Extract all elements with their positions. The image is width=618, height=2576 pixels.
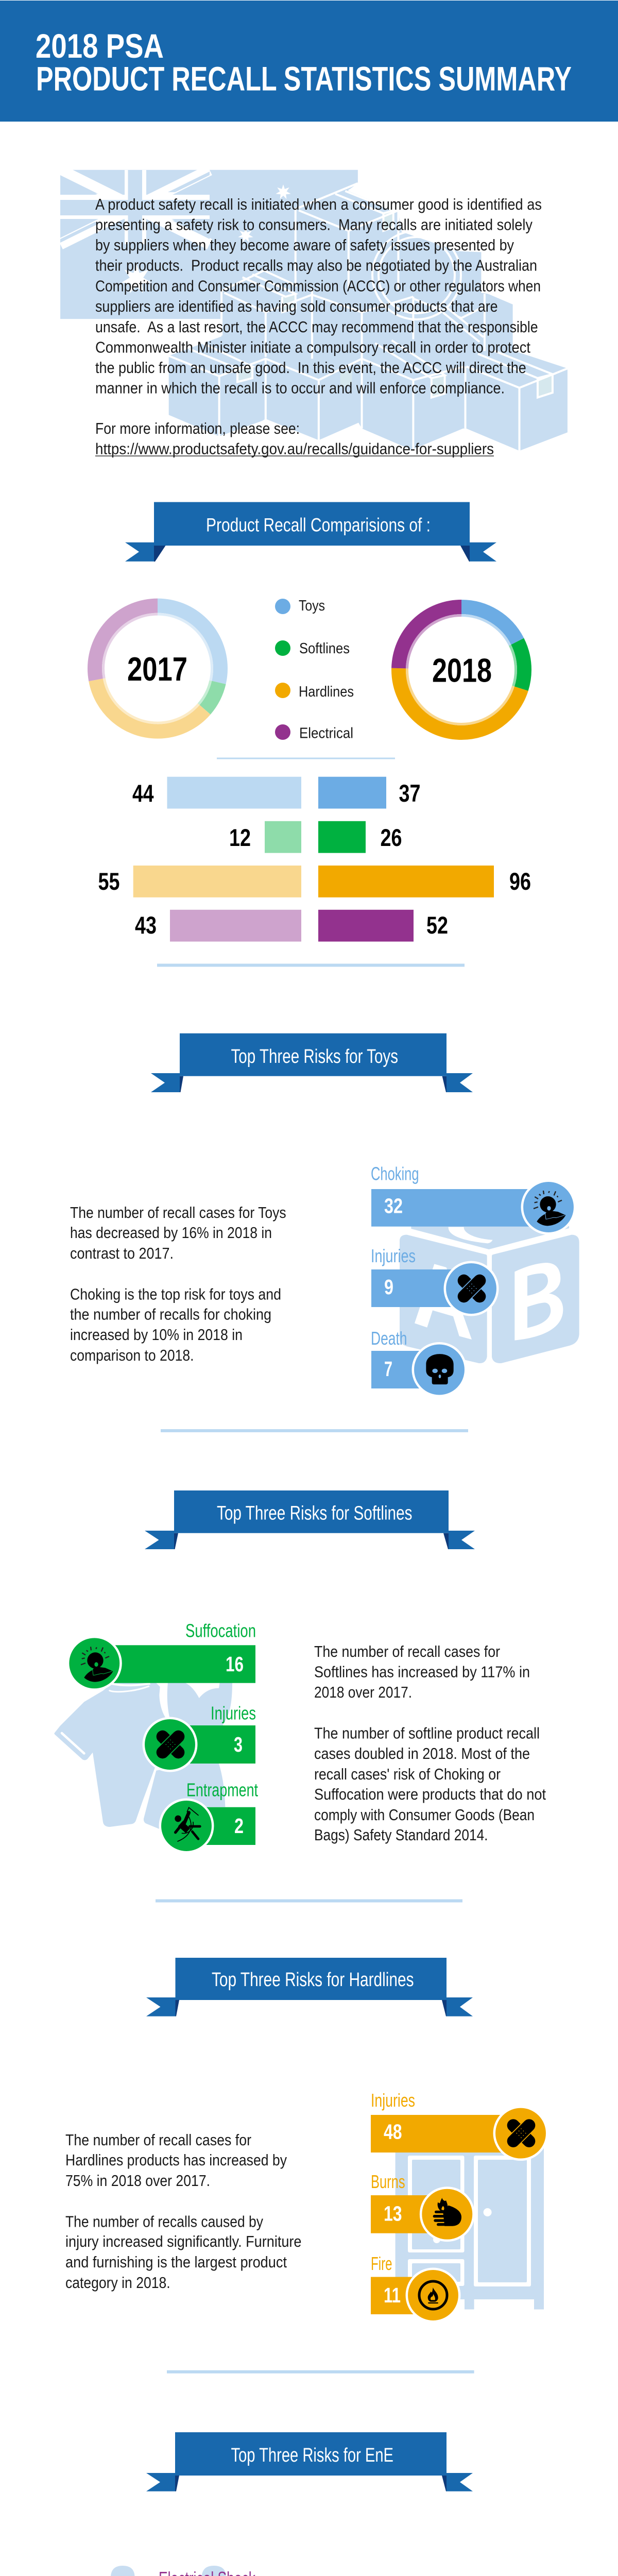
legend xyxy=(275,598,354,742)
intro text block: For more information, please see: xyxy=(95,419,300,437)
risk: injuries 3: Injuries xyxy=(211,1702,256,1724)
text: softlines summary: The number of softline product recall xyxy=(314,1724,540,1742)
text: softlines summary: Softlines has increased by 117% in xyxy=(314,1663,530,1681)
risk: injuries 9: 9 xyxy=(384,1275,393,1299)
butterfly bar chart 2017 vs 2018 xyxy=(98,777,531,942)
icon: bandage xyxy=(445,1262,497,1315)
risk: fire 11: 11 xyxy=(384,2283,401,2307)
legend: Toys xyxy=(299,598,325,614)
donut chart 2018 xyxy=(399,607,524,733)
text: hardlines summary: 75% in 2018 over 2017. xyxy=(65,2172,210,2190)
risk: suffocation 16 xyxy=(68,1620,256,1690)
text: softlines summary: cases doubled in 2018. Most of the xyxy=(314,1744,530,1762)
risk: choking 32: Choking xyxy=(371,1163,419,1184)
ribbon: product recall comparisons xyxy=(125,502,496,562)
butterfly bar chart 2017 vs 2018: 55 xyxy=(98,868,119,895)
text: hardlines summary xyxy=(65,2131,302,2292)
icon: entrapment xyxy=(160,1800,213,1852)
year label 2018: 2018 xyxy=(432,651,492,689)
background: electric plug xyxy=(88,2566,249,2576)
risk: injuries 3 xyxy=(144,1702,256,1771)
intro text block: the public from an unsafe good. In this event, the ACCC will direct the xyxy=(95,359,526,377)
header banner xyxy=(0,1,618,122)
intro text block: presenting a safety risk to consumers. Many recalls are initiated solely xyxy=(95,215,533,233)
background: australian flag and boxes xyxy=(60,170,568,451)
risk: fire 11 xyxy=(371,2253,459,2321)
text: hardlines summary: The number of recall cases for xyxy=(65,2131,251,2149)
text: softlines summary: comply with Consumer Goods (Bean xyxy=(314,1806,535,1824)
risk: entrapment 2 xyxy=(160,1780,258,1852)
union jack xyxy=(60,170,210,244)
year label 2017: 2017 xyxy=(127,650,187,688)
butterfly bar chart 2017 vs 2018: 52 xyxy=(426,911,448,939)
magnifying glass xyxy=(372,231,482,340)
intro text block: by suppliers when they become aware of safety issues presented by xyxy=(95,236,514,254)
background: wardrobe xyxy=(396,2148,544,2309)
ribbon heading: Top Three Risks for Toys xyxy=(231,1046,398,1067)
text: toys summary: increased by 10% in 2018 in xyxy=(70,1326,243,1344)
ribbon: hardlines xyxy=(146,1958,473,2016)
risk: death 7: Death xyxy=(371,1328,407,1349)
icon: choking xyxy=(522,1181,575,1233)
legend: Softlines xyxy=(299,640,350,657)
risk: choking 32 xyxy=(371,1163,575,1233)
risk: suffocation 16: Suffocation xyxy=(185,1620,256,1641)
icon: bandage xyxy=(494,2107,547,2160)
intro text block: A product safety recall is initiated when a consumer good is identified as xyxy=(95,195,542,213)
risk: burns 13: Burns xyxy=(371,2171,405,2192)
icon: flame in ring xyxy=(407,2269,459,2321)
ribbon: ene xyxy=(146,2432,473,2492)
intro text block: Commonwealth Minister initiate a compulsory recall in order to protect xyxy=(95,338,530,356)
text: hardlines summary: The number of recalls caused by xyxy=(65,2212,263,2231)
risk: injuries 9 xyxy=(371,1245,497,1315)
text: softlines summary: 2018 over 2017. xyxy=(314,1683,412,1701)
text: softlines summary: Suffocation were products that do not xyxy=(314,1785,546,1803)
text: toys summary xyxy=(70,1204,286,1364)
risk: injuries 48 xyxy=(371,2090,547,2160)
flag stars xyxy=(122,184,291,293)
title line 1: 2018 PSA xyxy=(36,27,164,65)
icon: suffocation xyxy=(68,1637,121,1690)
ribbon: toys xyxy=(151,1033,473,1092)
intro text block: their products. Product recalls may also be negotiated by the Australian xyxy=(95,257,537,274)
intro text block: Competition and Consumer Commission (ACCC) or other regulators when xyxy=(95,277,541,295)
risk: burns 13: 13 xyxy=(384,2202,402,2226)
text: softlines summary: recall cases' risk of Choking or xyxy=(314,1765,501,1783)
butterfly bar chart 2017 vs 2018: 96 xyxy=(509,868,531,895)
ribbon heading: Top Three Risks for Hardlines xyxy=(212,1969,414,1991)
text: softlines summary: The number of recall cases for xyxy=(314,1642,500,1660)
butterfly bar chart 2017 vs 2018: 26 xyxy=(380,824,402,851)
text: hardlines summary: and furnishing is the largest product xyxy=(65,2253,287,2271)
intro text block: suppliers are identified as having sold consumer products that are xyxy=(95,297,498,315)
text: hardlines summary: Hardlines products has increased by xyxy=(65,2151,287,2169)
risk: injuries 48: Injuries xyxy=(371,2090,415,2111)
donut chart 2017 xyxy=(95,606,220,732)
risk: death 7: 7 xyxy=(384,1357,392,1381)
risk: entrapment 2: 2 xyxy=(234,1814,244,1838)
butterfly bar chart 2017 vs 2018: 44 xyxy=(132,779,153,807)
background: t-shirt xyxy=(54,1682,232,1830)
risk: injuries 48: 48 xyxy=(384,2120,402,2144)
risk: injuries 3: 3 xyxy=(234,1733,243,1756)
ribbon heading: Top Three Risks for Softlines xyxy=(217,1503,412,1524)
text: hardlines summary: category in 2018. xyxy=(65,2274,170,2292)
risk: suffocation 16: 16 xyxy=(226,1652,244,1676)
risk: death 7 xyxy=(371,1328,466,1396)
text: toys summary: Choking is the top risk for toys and xyxy=(70,1285,281,1303)
icon: bandage xyxy=(144,1718,196,1771)
text: softlines summary: Bags) Safety Standard 2014. xyxy=(314,1826,488,1844)
ribbon heading: Product Recall Comparisions of : xyxy=(206,514,431,536)
text: toys summary: comparison to 2018. xyxy=(70,1346,194,1364)
background: abc toy block xyxy=(400,1226,579,1363)
text: toys summary: has decreased by 16% in 2018 in xyxy=(70,1224,272,1242)
legend: Hardlines xyxy=(299,684,354,700)
risk: injuries 9: Injuries xyxy=(371,1245,416,1266)
intro text block: https://www.productsafety.gov.au/recalls/guidance-for-suppliers xyxy=(95,439,494,457)
intro text block xyxy=(95,195,542,457)
butterfly bar chart 2017 vs 2018: 43 xyxy=(135,911,157,939)
text: toys summary: the number of recalls for choking xyxy=(70,1306,271,1323)
icon: skull xyxy=(413,1343,466,1396)
risk: choking 32: 32 xyxy=(384,1194,403,1218)
butterfly bar chart 2017 vs 2018: 37 xyxy=(399,779,420,807)
intro text block: manner in which the recall is to occur and will enforce compliance. xyxy=(95,379,505,397)
legend: Electrical xyxy=(299,725,353,742)
text: toys summary: contrast to 2017. xyxy=(70,1244,174,1262)
text: hardlines summary: injury increased significantly. Furniture xyxy=(65,2232,302,2250)
text: toys summary: The number of recall cases for Toys xyxy=(70,1204,286,1222)
text: softlines summary xyxy=(314,1642,546,1844)
ribbon: softlines xyxy=(145,1490,475,1549)
intro text block: unsafe. As a last resort, the ACCC may recommend that the responsible xyxy=(95,318,538,336)
icon: burning hand xyxy=(421,2188,474,2241)
risk: burns 13 xyxy=(371,2171,474,2241)
risk: fire 11: Fire xyxy=(371,2253,392,2274)
ribbon heading: Top Three Risks for EnE xyxy=(231,2445,393,2466)
risk: entrapment 2: Entrapment xyxy=(186,1780,258,1800)
butterfly bar chart 2017 vs 2018: 12 xyxy=(229,824,251,851)
